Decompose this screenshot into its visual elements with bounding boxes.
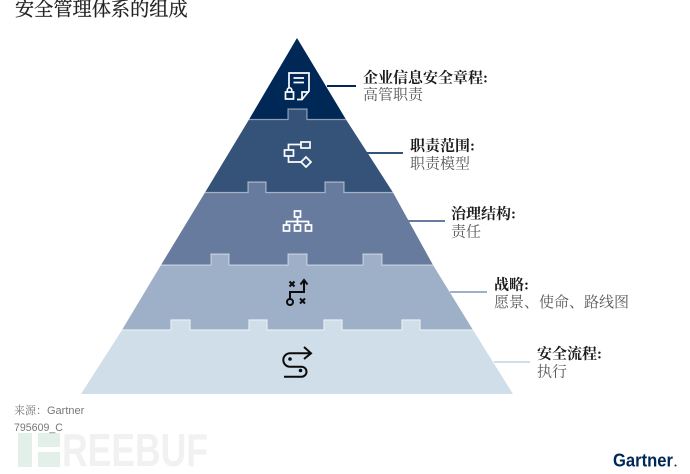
watermark: FREEBUF [18, 424, 208, 474]
pyramid tier 2: responsibility scope [205, 109, 393, 192]
label: governance structure: 治理结构: [451, 204, 516, 222]
icon: org chart [284, 211, 312, 231]
icon: workflow diagram [284, 142, 311, 167]
label: security processes: 安全流程: [537, 344, 602, 362]
pyramid tier 3: governance structure [161, 182, 433, 265]
pyramid tier 4: strategy [122, 254, 473, 330]
label: responsibility scope: 职责范围: [410, 136, 475, 154]
connector line: tier 4 [450, 291, 487, 293]
pyramid tier 5: security processes [81, 320, 513, 394]
label: strategy: 愿景、使命、路线图 [494, 294, 629, 311]
connector line: tier 5 [494, 361, 530, 363]
label: security processes: 执行 [537, 364, 567, 380]
connector line: tier 1 [327, 85, 356, 87]
label: governance structure [451, 204, 516, 240]
label: responsibility scope: 职责模型 [410, 154, 470, 172]
icon: winding process arrow [283, 347, 311, 377]
icon: document with lock [286, 73, 309, 100]
title: 安全管理体系的组成 [15, 0, 188, 20]
logo: Gartner: Gartner [613, 450, 673, 470]
source note: 来源：Gartner [14, 403, 85, 417]
label: enterprise security charter: 企业信息安全章程: [363, 68, 488, 86]
label: strategy [494, 276, 629, 311]
connector line: tier 3 [407, 220, 445, 222]
label: enterprise security charter: 高管职责 [363, 86, 424, 104]
icon: strategy path [287, 280, 308, 305]
document code: 795609_C [14, 422, 63, 434]
label: strategy: 战略: [494, 276, 529, 294]
label: security processes [537, 344, 602, 380]
label: responsibility scope [410, 136, 475, 172]
label: enterprise security charter [363, 68, 488, 104]
label: governance structure: 责任 [451, 224, 481, 240]
connector line: tier 2 [367, 152, 403, 154]
pyramid tier 1: enterprise charter [249, 38, 346, 120]
pyramid [81, 38, 513, 394]
